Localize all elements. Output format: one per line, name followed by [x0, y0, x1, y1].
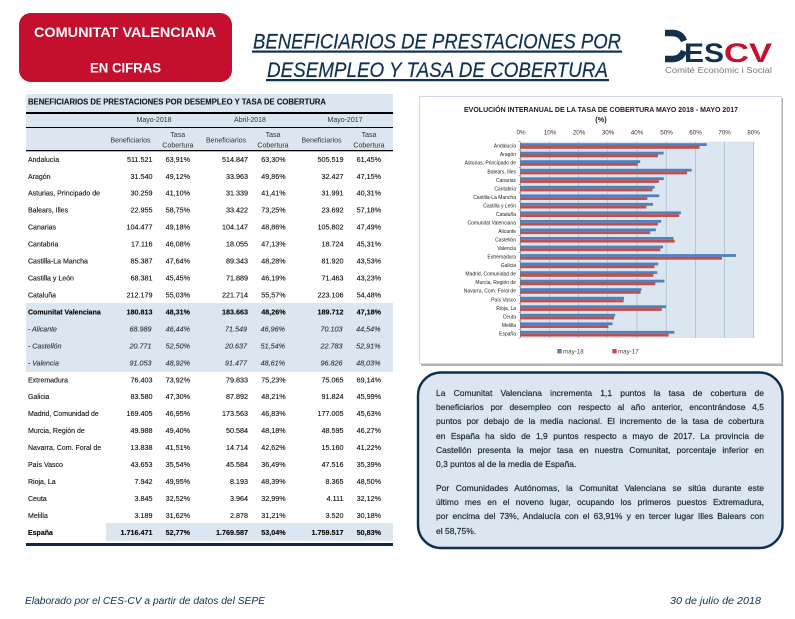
row: Andalucía: 63,30%	[261, 155, 286, 164]
row: Valencia: 91.477	[225, 358, 248, 367]
row: Alicante: 46,96%	[261, 324, 286, 333]
row: Castilla y León: 71.463	[322, 274, 344, 282]
row: Canarias: Canarias	[28, 225, 57, 232]
row: Galicia: 47,30%	[166, 392, 191, 401]
callout text: el 58,75%.	[436, 526, 476, 536]
category labels: Murcia, Región de	[475, 280, 516, 286]
top axis labels: 60%	[689, 130, 702, 136]
table column headers	[26, 112, 393, 151]
row: Navarra: 15.160	[322, 443, 344, 452]
row: Canarias: 47,49%	[357, 223, 382, 232]
row: País Vasco: 35,54%	[166, 460, 191, 469]
row: Andalucía: 63,91%	[166, 155, 191, 164]
row: Madrid: Madrid, Comunidad de	[28, 411, 99, 418]
row: Comunitat Valenciana	[28, 307, 382, 316]
row: Asturias: 31.991	[322, 189, 344, 198]
main title	[252, 30, 622, 82]
row: Cantabria: Cantabria	[28, 242, 58, 249]
row: España: 53,04%	[261, 528, 286, 537]
row: Valencia: - Valencia	[28, 360, 59, 367]
row: Comunitat Valenciana: 183.663	[222, 307, 248, 316]
row: Valencia: 48,61%	[261, 358, 286, 367]
chart title: (%)	[595, 115, 607, 124]
row: Cataluña: 55,57%	[261, 290, 286, 300]
row: Extremadura: 76.403	[131, 375, 153, 384]
row: Canarias: 104.477	[127, 223, 152, 232]
row: Castellón: 52,50%	[166, 341, 191, 350]
row: Castellón	[28, 341, 381, 350]
category labels: Madrid, Comunidad de	[465, 272, 516, 278]
row: Melilla: Melilla	[28, 513, 48, 520]
row: Melilla: 30,18%	[357, 511, 382, 520]
bars: may-17	[520, 146, 722, 336]
logo: CESCV: Comité Econòmic i Social	[665, 66, 772, 75]
top axis labels: 40%	[631, 130, 644, 136]
row: Comunitat Valenciana: 48,31%	[166, 307, 191, 316]
row: Andalucía: 511.521	[127, 155, 152, 164]
row: Castilla y León: 43,23%	[357, 274, 382, 282]
row: Cantabria: 45,31%	[357, 240, 382, 249]
row: Castilla y León: Castilla y León	[28, 276, 74, 282]
top axis labels	[516, 130, 760, 136]
row: Cantabria: 46,08%	[166, 240, 191, 249]
row: Aragón: Aragón	[28, 174, 51, 181]
row: Aragón: 33.963	[226, 172, 248, 181]
row: Extremadura: 69,14%	[357, 375, 382, 384]
logo: CESCV: CV	[724, 38, 772, 68]
top axis labels: 0%	[516, 130, 526, 136]
row: Ceuta: 32,52%	[166, 494, 191, 503]
category labels	[464, 144, 516, 337]
row: España: 1.759.517	[312, 528, 344, 537]
row: Madrid: 173.563	[222, 409, 248, 418]
row: Andalucía: 61,45%	[357, 155, 382, 164]
row: Extremadura: 75,23%	[261, 375, 286, 384]
row: Cataluña: 221.714	[222, 290, 248, 300]
row: País Vasco: 36,49%	[261, 460, 286, 469]
top axis labels: 70%	[718, 130, 731, 136]
row: Valencia: 96.826	[321, 358, 343, 367]
row: Melilla: 3.189	[134, 511, 152, 520]
table column headers: Tasa	[266, 132, 280, 139]
category labels: Aragón	[500, 152, 516, 158]
row: Extremadura: 73,92%	[166, 375, 191, 384]
row: Castilla-La Mancha: 48,28%	[261, 257, 286, 266]
row: Asturias: 31.339	[226, 189, 248, 198]
row: Balears: 23.692	[322, 206, 344, 215]
row: Aragón: 31.540	[131, 172, 153, 181]
row: Castilla y León: 45,45%	[166, 274, 191, 282]
row: España: España	[28, 530, 53, 537]
row: Murcia: 49,40%	[166, 426, 191, 435]
category labels: Castilla-La Mancha	[473, 195, 516, 201]
row: Cantabria: 17.116	[131, 240, 152, 249]
category labels: Castilla y León	[483, 203, 516, 209]
category labels: Castellón	[495, 238, 516, 244]
callout text	[436, 388, 764, 536]
table: beneficiarios y tasa de cobertura	[26, 94, 393, 546]
row: País Vasco: 35,39%	[357, 460, 382, 469]
row: Balears: 22.955	[131, 206, 153, 215]
row: España: 1.716.471	[121, 528, 152, 537]
row: Extremadura: Extremadura	[28, 377, 68, 384]
row: Alicante: - Alicante	[28, 326, 57, 333]
row: Castellón: 51,54%	[261, 341, 286, 350]
table column headers: Beneficiarios	[110, 138, 151, 144]
bars: may-18	[520, 143, 736, 334]
row: Canarias	[28, 223, 382, 232]
row: Madrid: 45,63%	[357, 409, 382, 418]
row: Ceuta: 32,12%	[357, 494, 382, 503]
row: Castilla-La Mancha: 43,53%	[357, 257, 382, 266]
row: Rioja	[28, 477, 382, 486]
row: Canarias: 49,18%	[166, 223, 191, 232]
row: País Vasco	[28, 460, 382, 469]
row: Ceuta: 3.845	[134, 494, 152, 503]
row: Ceuta: 32,99%	[261, 494, 286, 503]
row: Galicia: 91.824	[322, 392, 344, 401]
row: Aragón: 49,86%	[261, 172, 286, 181]
row: Andalucía: 505.519	[318, 155, 344, 164]
row: Asturias: 30.259	[131, 189, 153, 198]
category labels: Rioja, La	[496, 306, 516, 312]
row: País Vasco: 47.516	[322, 460, 344, 469]
row: Murcia: 50.584	[226, 426, 248, 435]
row: Murcia: 48,18%	[261, 426, 286, 435]
row: Asturias: 40,31%	[357, 189, 382, 198]
callout text: Por Comunidades Autónomas, la Comunitat Valenciana se sitúa durante este	[436, 483, 764, 493]
table column headers: Cobertura	[162, 142, 194, 149]
row: Rioja: 48,39%	[261, 477, 286, 486]
row: Ceuta	[28, 494, 382, 503]
row: Valencia	[28, 358, 381, 367]
row: Alicante: 46,44%	[166, 324, 191, 333]
category labels: Cataluña	[496, 212, 516, 218]
row: Cantabria: 18.724	[322, 240, 344, 249]
category labels: Melilla	[502, 323, 516, 329]
row: Castellón: 20.637	[224, 341, 248, 350]
row: Valencia: 48,92%	[166, 358, 191, 367]
plot background and grid	[518, 142, 754, 338]
row: Rioja: 7.942	[134, 477, 152, 486]
row: Melilla: 31,62%	[166, 511, 191, 520]
row: Canarias: 48,86%	[261, 223, 286, 232]
row: Cataluña	[28, 290, 382, 300]
row: País Vasco: 45.584	[226, 460, 248, 469]
row: Ceuta: 4.111	[327, 494, 344, 503]
legend: may-17	[618, 348, 639, 355]
row: Andalucía	[28, 155, 382, 164]
row: Navarra: 14.714	[226, 443, 248, 452]
row: España: 50,83%	[357, 528, 382, 537]
row: Castellón: 52,91%	[356, 341, 381, 350]
row: Andalucía: Andalucía	[28, 157, 59, 164]
red badge: Comunitat Valenciana en cifras: EN CIFRAS	[90, 60, 161, 76]
row: Cataluña: Cataluña	[28, 292, 56, 300]
row: Galicia: 48,21%	[261, 392, 286, 401]
row: Alicante: 71.549	[225, 324, 247, 333]
row: Castilla y León: 68.381	[131, 274, 153, 282]
category labels: Canarias	[496, 178, 516, 184]
row: Aragón: 47,15%	[357, 172, 382, 181]
callout text: beneficiarios por desempleo con respecto al año anterior, encontrándose 4,5	[436, 402, 764, 412]
callout text: 0,3 puntos al de la media de España.	[436, 459, 576, 469]
row: Comunitat Valenciana: Comunitat Valenciana	[28, 309, 101, 316]
row: Madrid: 46,95%	[166, 409, 191, 418]
row: Alicante	[28, 324, 381, 333]
category labels: Cantabria	[494, 186, 516, 192]
row: Cataluña: 54,48%	[357, 290, 382, 300]
row: Navarra	[28, 443, 382, 452]
row: Asturias: Asturias, Principado de	[28, 191, 100, 198]
table column headers: Tasa	[362, 132, 376, 139]
row: Andalucía: 514.847	[222, 155, 248, 164]
row: Asturias: 41,41%	[261, 189, 286, 198]
highlight band: España	[106, 523, 393, 541]
row: Castilla y León: 46,19%	[261, 274, 286, 282]
row: País Vasco: País Vasco	[28, 462, 63, 469]
row: Melilla: 3.520	[326, 511, 344, 520]
top axis labels: 80%	[747, 130, 760, 136]
row: Rioja: 49,95%	[166, 477, 191, 486]
row: Madrid: 169.405	[127, 409, 152, 418]
row: Balears: 73,25%	[261, 206, 286, 215]
table heading band: BENEFICIARIOS DE PRESTACIONES POR DESEMPLEO Y TASA DE COBERTURA	[28, 97, 326, 106]
row: País Vasco: 43.653	[131, 460, 153, 469]
row: Comunitat Valenciana: 180.813	[127, 307, 152, 316]
row: Aragón: 49,12%	[166, 172, 191, 181]
row: Extremadura	[28, 375, 382, 384]
row: Galicia	[28, 392, 382, 401]
category labels: Galicia	[501, 263, 516, 269]
table column headers: Mayo-2018	[136, 117, 172, 124]
row: Madrid: 46,83%	[261, 409, 286, 418]
row: Cataluña: 223.106	[318, 290, 344, 300]
row: Comunitat Valenciana: 189.712	[318, 307, 344, 316]
row: Galicia: Galicia	[28, 394, 50, 401]
table column headers: Mayo-2017	[327, 117, 363, 124]
row: Murcia: 49.988	[131, 426, 153, 435]
callout text: por encima del 73%, Andalucía con el 63,91% y en tercer lugar Illes Balears con	[436, 511, 764, 521]
row: Balears: 33.422	[226, 206, 248, 215]
table column headers: Cobertura	[353, 142, 385, 149]
row: Canarias: 104.147	[222, 223, 248, 232]
row: Murcia: 48.595	[322, 426, 344, 435]
row: Murcia: Murcia, Región de	[28, 428, 85, 435]
row: Madrid	[28, 409, 382, 418]
logo: CESCV	[665, 33, 772, 75]
row: Rioja: 8.193	[230, 477, 248, 486]
row: Balears: Balears, Illes	[28, 208, 69, 215]
row: Comunitat Valenciana: 48,26%	[261, 307, 286, 316]
callout text: Castellón presenta la mejor tasa en nuestra Comunitat, porcentaje inferior en	[436, 445, 764, 455]
chart title: EVOLUCIÓN INTERANUAL DE LA TASA DE COBERTURA MAYO 2018 - MAYO 2017	[464, 105, 738, 114]
callout text: puntos por debajo de la media nacional. El incremento de la tasa de cobertura	[436, 416, 764, 426]
chart panel: evolución interanual de la tasa de cobertura	[420, 96, 783, 366]
row: Asturias: 41,10%	[166, 189, 191, 198]
callout text: en España ha sido de 1,9 puntos respecto a mayo de 2017. La provincia de	[436, 431, 764, 441]
row: Castilla-La Mancha: 89.343	[226, 257, 248, 266]
category labels: Extremadura	[487, 255, 516, 261]
row: España: 1.769.587	[216, 528, 248, 537]
row: Cantabria: 47,13%	[261, 240, 286, 249]
highlight band: Comunitat Valenciana	[26, 303, 393, 372]
row: Murcia: 46,27%	[357, 426, 382, 435]
category labels: Balears, Illes	[487, 169, 516, 175]
row: Castilla-La Mancha: 85.387	[131, 257, 153, 266]
row: Galicia: 83.580	[131, 392, 153, 401]
category labels: Alicante	[498, 229, 516, 235]
row: Melilla: 2.878	[230, 511, 248, 520]
legend: may-18	[563, 348, 584, 355]
row: Galicia: 87.892	[226, 392, 248, 401]
row: Melilla	[28, 511, 382, 520]
footer source: Elaborado por el CES-CV a partir de datos del SEPE	[25, 596, 265, 607]
row: Asturias	[28, 189, 382, 198]
row: Castilla-La Mancha	[28, 257, 382, 266]
main title: DESEMPLEO Y TASA DE COBERTURA	[267, 59, 608, 82]
row: Balears: 58,75%	[166, 206, 191, 215]
table column headers: Beneficiarios	[206, 138, 247, 144]
row: España	[28, 528, 382, 537]
row: Castellón: 20.771	[129, 341, 152, 350]
chart title	[464, 105, 738, 124]
row: Madrid: 177.005	[318, 409, 344, 418]
row: Alicante: 68.989	[130, 324, 152, 333]
callout text: último mes en el noveno lugar, ocupando los primeros puestos Extremadura,	[436, 496, 764, 506]
table heading band	[26, 94, 393, 112]
row: Valencia: 48,03%	[356, 358, 381, 367]
table column headers: Beneficiarios	[301, 138, 342, 144]
row: Castilla y León: 71.889	[226, 274, 248, 282]
row: Cataluña: 55,03%	[166, 290, 191, 300]
row: Galicia: 45,99%	[357, 392, 382, 401]
row: Navarra: 42,62%	[261, 443, 286, 452]
table bottom rule	[26, 543, 393, 546]
red badge: Comunitat Valenciana en cifras	[19, 13, 232, 82]
top axis labels: 10%	[544, 130, 557, 136]
callout text: La Comunitat Valenciana incrementa 1,1 puntos la tasa de cobertura de	[436, 388, 764, 398]
table column headers: Tasa	[170, 132, 185, 139]
row: Castilla-La Mancha: 81.920	[322, 257, 344, 266]
row: Navarra: 41,22%	[357, 443, 382, 452]
top axis labels: 30%	[602, 130, 615, 136]
row: Aragón	[28, 172, 382, 181]
main title: BENEFICIARIOS DE PRESTACIONES POR	[253, 30, 621, 54]
row: Valencia: 91.053	[130, 358, 152, 367]
row: Castilla-La Mancha: Castilla-La Mancha	[28, 259, 88, 266]
row: Comunitat Valenciana: 47,18%	[357, 307, 382, 316]
top axis labels: 50%	[660, 130, 673, 136]
table column headers: Cobertura	[257, 142, 289, 149]
category labels: España	[499, 331, 516, 337]
row: Castilla y León	[28, 274, 382, 282]
legend	[557, 348, 639, 355]
row: Alicante: 44,54%	[356, 324, 381, 333]
row: Navarra: 41,51%	[166, 443, 191, 452]
logo: CESCV: ES	[684, 38, 724, 68]
category labels: Ceuta	[503, 314, 516, 320]
category labels: Andalucía	[494, 144, 516, 150]
category labels: Comunitat Valenciana	[467, 220, 516, 226]
row: Balears	[28, 206, 382, 215]
red badge: Comunitat Valenciana en cifras: COMUNITAT VALENCIANA	[34, 24, 216, 40]
row: Alicante: 70.103	[321, 324, 343, 333]
row: Canarias: 105.802	[318, 223, 344, 232]
row: Extremadura: 75.065	[322, 375, 344, 384]
row: Rioja: 8.365	[326, 477, 344, 486]
row: Ceuta: 3.964	[230, 494, 248, 503]
row: Ceuta: Ceuta	[28, 496, 47, 503]
row: Extremadura: 79.833	[226, 375, 248, 384]
row: Navarra: Navarra, Com. Foral de	[28, 445, 101, 452]
table column headers: Abril-2018	[234, 117, 266, 124]
category labels: Navarra, Com. Foral de	[464, 289, 516, 295]
row: Navarra: 13.838	[131, 443, 153, 452]
row: Cantabria	[28, 240, 382, 249]
row: Aragón: 32.427	[322, 172, 344, 181]
row: Castellón: 22.783	[320, 341, 343, 350]
row: España: 52,77%	[166, 528, 191, 537]
row: Rioja: Rioja, La	[28, 479, 56, 486]
row: Cantabria: 18.055	[226, 240, 248, 249]
row: Rioja: 48,50%	[357, 477, 382, 486]
callout background	[418, 372, 782, 548]
footer date: 30 de julio de 2018	[670, 596, 761, 607]
row: Castilla-La Mancha: 47,64%	[166, 257, 191, 266]
category labels: Asturias, Principado de	[465, 161, 516, 167]
category labels: País Vasco	[491, 297, 516, 303]
row: Melilla: 31,21%	[261, 511, 286, 520]
row: Balears: 57,18%	[357, 206, 382, 215]
category labels: Valencia	[497, 246, 516, 252]
top axis labels: 20%	[573, 130, 586, 136]
row: Murcia	[28, 426, 382, 435]
row: Castellón: - Castellón	[28, 343, 62, 350]
row: Cataluña: 212.179	[127, 290, 152, 300]
chart frame	[420, 96, 783, 366]
